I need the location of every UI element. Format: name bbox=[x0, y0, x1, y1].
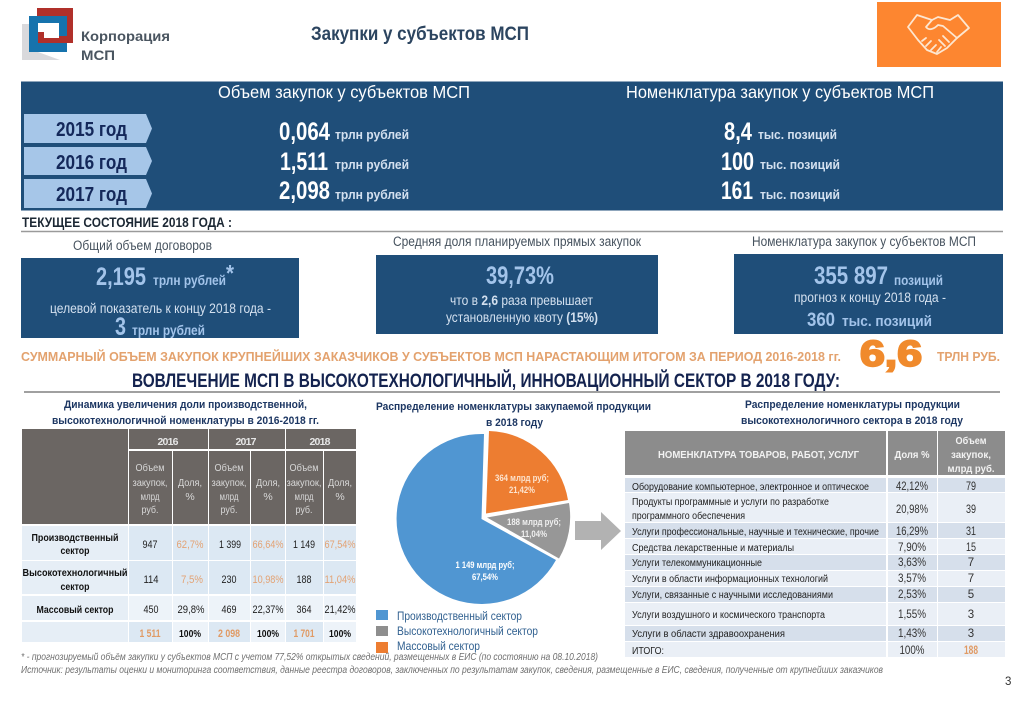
row: IT: 7 bbox=[968, 573, 974, 585]
row: software: программного обеспечения bbox=[632, 510, 745, 522]
row: IT: Услуги в области информационных технологий bbox=[632, 573, 828, 585]
callout: total volume 6,6 trillion bbox=[21, 333, 1000, 374]
panel: nomenclature 2018 bbox=[734, 234, 1003, 334]
row: software: 20,98% bbox=[896, 504, 928, 516]
row: computers and electronics: 79 bbox=[966, 481, 976, 493]
logo: Корпорация МСП bbox=[22, 8, 170, 63]
table header text: закупок, bbox=[132, 477, 168, 489]
row: totals: 2 098 bbox=[218, 628, 240, 640]
row: software bbox=[632, 496, 976, 522]
callout: total volume 6,6 trillion: 6,6 bbox=[860, 333, 922, 374]
panel: nomenclature 2018: Номенклатура закупок у субъектов МСП bbox=[752, 234, 976, 249]
title: Закупки у субъектов МСП bbox=[311, 24, 529, 45]
pie slice: high-tech sector: 11,04% bbox=[521, 529, 547, 539]
table header text: закупок, bbox=[212, 477, 246, 489]
panel: total contracts: 2,195 bbox=[96, 263, 146, 291]
row: totals: 1 511 bbox=[140, 628, 160, 640]
heading: procurement volume: Объем закупок у субъектов МСП bbox=[218, 82, 470, 102]
row: totals: 100% bbox=[179, 628, 202, 640]
nomenclature 2016: тыс. позиций bbox=[760, 157, 840, 172]
panel: nomenclature 2018: прогноз к концу 2018 года - bbox=[794, 290, 946, 305]
volume 2017: трлн рублей bbox=[335, 187, 409, 202]
row: air and space: 3 bbox=[968, 609, 974, 621]
row: healthcare bbox=[632, 628, 974, 640]
row: totals bbox=[140, 628, 352, 640]
nomenclature 2016: 100 bbox=[721, 148, 754, 176]
pie slice: mass sector: 364 млрд руб; bbox=[495, 473, 549, 483]
table title: Распределение номенклатуры продукции bbox=[745, 399, 960, 411]
row: mass sector: 450 bbox=[144, 604, 158, 616]
table header text: млрд bbox=[294, 491, 314, 503]
row: totals: 1 701 bbox=[294, 628, 314, 640]
row: research bbox=[632, 589, 974, 601]
row: high-tech sector bbox=[22, 568, 356, 593]
row: mass sector: 364 bbox=[296, 604, 312, 616]
volume 2016 bbox=[280, 148, 409, 176]
row: mass sector: 22,37% bbox=[252, 604, 284, 616]
footnote: Источник: результаты оценки и мониторинга соответствия, данные реестра договоров, заключенных по результатам закупок, сведения, размещенные в ЕИС, сведения, полученные от крупнейших заказчиков bbox=[21, 665, 883, 676]
table header bbox=[625, 431, 1005, 475]
row: mass sector bbox=[36, 604, 356, 616]
table header text: % bbox=[185, 491, 195, 503]
table header text bbox=[132, 436, 352, 516]
row: production sector: 1 149 bbox=[293, 539, 315, 551]
row: total bbox=[632, 645, 978, 657]
table header text: 2018 bbox=[310, 436, 331, 448]
table header: Доля % bbox=[894, 449, 930, 461]
legend bbox=[376, 609, 538, 653]
heading: current state 2018: ТЕКУЩЕЕ СОСТОЯНИЕ 2018 ГОДА : bbox=[22, 214, 232, 230]
row: research: Услуги, связанные с научными исследованиями bbox=[632, 590, 833, 601]
row: computers and electronics: Оборудование компьютерное, электронное и оптическое bbox=[632, 481, 869, 493]
pie title: в 2018 году bbox=[486, 417, 544, 429]
row: high-tech sector: 10,98% bbox=[252, 574, 284, 586]
panel: direct procurement share: 39,73% bbox=[486, 262, 554, 290]
panel: total contracts: 3 bbox=[115, 313, 126, 341]
nomenclature 2016 bbox=[721, 148, 840, 176]
pie slice: production sector: 67,54% bbox=[472, 572, 498, 582]
row: healthcare: 3 bbox=[968, 628, 974, 640]
row: software: Продукты программные и услуги по разработке bbox=[632, 496, 829, 508]
table header text: % bbox=[263, 491, 273, 503]
row: high-tech sector: 188 bbox=[296, 574, 312, 586]
panel: direct procurement share: установленную квоту (15%) bbox=[446, 310, 598, 325]
arrow label: 2015: 2015 год bbox=[56, 119, 127, 141]
page number: 3 bbox=[1005, 676, 1011, 688]
row: total: 188 bbox=[964, 645, 978, 657]
table header text: руб. bbox=[220, 504, 238, 516]
panel: nomenclature 2018: тыс. позиций bbox=[842, 313, 932, 330]
row: research: 5 bbox=[968, 589, 974, 601]
panel: high-tech nomenclature table bbox=[625, 399, 1005, 657]
row: production sector: 66,64% bbox=[252, 539, 284, 551]
logo: Корпорация МСП: МСП bbox=[81, 47, 115, 63]
footnote bbox=[21, 651, 883, 676]
table header text: Объем bbox=[290, 462, 318, 474]
pie slice: production sector bbox=[397, 434, 556, 604]
footnote: * - прогнозируемый объём закупки у субъектов МСП с учетом 77,52% открытых сведений, размещенных в ЕИС (по состоянию на 08.10.2018) bbox=[21, 651, 598, 663]
row: professional services: Услуги профессиональные, научные и технические, прочие bbox=[632, 526, 879, 538]
row: production sector: 67,54% bbox=[324, 539, 356, 551]
row: computers and electronics: 42,12% bbox=[896, 481, 928, 493]
row: medicines: Средства лекарственные и материалы bbox=[632, 543, 794, 554]
panel: total contracts: Общий объем договоров bbox=[73, 238, 212, 253]
pie title bbox=[376, 401, 651, 429]
panel: 2015-2017 indicators bbox=[21, 82, 1003, 210]
table header text: Объем bbox=[136, 462, 164, 474]
row: production sector bbox=[32, 533, 356, 557]
row: totals: 100% bbox=[257, 628, 280, 640]
pie slice: mass sector: 21,42% bbox=[509, 485, 535, 495]
table header text: 2017 bbox=[236, 436, 257, 448]
row: telecom bbox=[632, 557, 974, 569]
table body fills bbox=[22, 526, 356, 642]
row: high-tech sector: Высокотехнологичный bbox=[22, 568, 128, 579]
volume 2017: 2,098 bbox=[279, 177, 330, 205]
row: healthcare: 1,43% bbox=[898, 628, 926, 640]
arrow label: 2017 bbox=[24, 179, 152, 208]
table header text: руб. bbox=[142, 504, 158, 516]
row: total: ИТОГО: bbox=[632, 646, 664, 657]
arrow label: 2016: 2016 год bbox=[56, 152, 127, 174]
legend: Высокотехнологичный сектор bbox=[397, 624, 538, 638]
table header text: закупок, bbox=[286, 477, 322, 489]
row: total: 100% bbox=[900, 645, 924, 657]
row: production sector: 947 bbox=[142, 539, 158, 551]
panel: pie chart bbox=[376, 401, 651, 653]
panel: nomenclature 2018: 355 897 bbox=[814, 262, 888, 290]
panel: dynamics table bbox=[22, 399, 356, 642]
row: high-tech sector: 7,5% bbox=[181, 574, 203, 586]
panel: total contracts: * bbox=[226, 260, 234, 286]
pie slice: high-tech sector bbox=[487, 503, 570, 558]
pie slice: high-tech sector: 188 млрд руб; bbox=[507, 517, 561, 527]
pie slice: mass sector bbox=[486, 431, 568, 514]
panel: total contracts: трлн рублей bbox=[153, 273, 226, 288]
volume 2015 bbox=[279, 118, 409, 146]
table header text: млрд bbox=[220, 491, 238, 503]
table header: Объем bbox=[956, 435, 987, 447]
row: high-tech sector: 11,04% bbox=[324, 574, 356, 586]
table header text: Доля, bbox=[178, 477, 202, 489]
panel: total contracts: трлн рублей bbox=[132, 323, 205, 338]
panel: direct procurement share: что в 2,6 раза превышает bbox=[450, 293, 593, 308]
volume 2015: 0,064 bbox=[279, 118, 330, 146]
arrow label: 2017: 2017 год bbox=[56, 184, 127, 206]
row: IT bbox=[632, 573, 974, 585]
nomenclature 2017 bbox=[721, 177, 840, 205]
panel: direct procurement share: Средняя доля планируемых прямых закупок bbox=[393, 234, 641, 249]
row: production sector: 1 399 bbox=[219, 539, 241, 551]
table header text: Доля, bbox=[256, 477, 280, 489]
table row stripes bbox=[625, 478, 1005, 657]
row: air and space bbox=[632, 609, 974, 621]
row: medicines: 7,90% bbox=[898, 542, 926, 554]
table header text: % bbox=[335, 491, 345, 503]
legend: Производственный сектор bbox=[397, 609, 522, 623]
panel: nomenclature 2018: 360 bbox=[807, 310, 835, 331]
table header: НОМЕНКЛАТУРА ТОВАРОВ, РАБОТ, УСЛУГ bbox=[658, 449, 859, 461]
heading: procurement nomenclature: Номенклатура закупок у субъектов МСП bbox=[626, 82, 934, 102]
table header: млрд руб. bbox=[948, 463, 995, 475]
panel: direct procurement share bbox=[376, 234, 658, 334]
panel: total contracts bbox=[21, 238, 299, 341]
row: air and space: 1,55% bbox=[898, 609, 926, 621]
pie title: Распределение номенклатуры закупаемой продукции bbox=[376, 401, 651, 413]
callout: total volume 6,6 trillion: ТРЛН РУБ. bbox=[937, 350, 1000, 364]
panel: total contracts: целевой показатель к концу 2018 года - bbox=[50, 300, 271, 316]
row: IT: 3,57% bbox=[898, 573, 926, 585]
row: high-tech sector: 230 bbox=[222, 574, 236, 586]
pie slice: production sector: 1 149 млрд руб; bbox=[456, 560, 514, 570]
row: mass sector: Массовый сектор bbox=[36, 605, 114, 616]
table header text: руб. bbox=[296, 504, 312, 516]
row: professional services: 16,29% bbox=[896, 526, 928, 538]
arrow bbox=[575, 512, 621, 550]
table title: Динамика увеличения доли производственной, bbox=[64, 399, 307, 411]
table title: высокотехнологичного сектора в 2018 году bbox=[741, 415, 964, 427]
volume 2017 bbox=[279, 177, 409, 205]
section heading: high-tech involvement: ВОВЛЕЧЕНИЕ МСП В ВЫСОКОТЕХНОЛОГИЧНЫЙ, ИННОВАЦИОННЫЙ СЕКТОР В 2018 ГОДУ: bbox=[132, 370, 840, 392]
table title bbox=[741, 399, 964, 427]
callout: total volume 6,6 trillion: СУММАРНЫЙ ОБЪЕМ ЗАКУПОК КРУПНЕЙШИХ ЗАКАЗЧИКОВ У СУБЪЕКТОВ МСП НАРАСТАЮЩИМ ИТОГОМ ЗА ПЕРИОД 2016-2018 гг. bbox=[21, 349, 841, 364]
arrow label: 2015 bbox=[24, 114, 152, 143]
panel: nomenclature 2018: позиций bbox=[894, 273, 943, 288]
nomenclature 2017: тыс. позиций bbox=[760, 187, 840, 202]
nomenclature 2017: 161 bbox=[721, 177, 753, 205]
row: totals: 100% bbox=[329, 628, 352, 640]
volume 2015: трлн рублей bbox=[335, 127, 409, 142]
arrow label: 2016 bbox=[24, 147, 152, 175]
table title bbox=[52, 399, 319, 427]
volume 2016: трлн рублей bbox=[335, 157, 409, 172]
logo: Корпорация МСП: Корпорация bbox=[81, 28, 170, 44]
row: research: 2,53% bbox=[898, 589, 926, 601]
row: telecom: Услуги телекоммуникационные bbox=[632, 558, 762, 569]
row: mass sector: 29,8% bbox=[178, 604, 205, 616]
table header cells bbox=[22, 429, 356, 524]
row: medicines: 15 bbox=[966, 542, 976, 554]
legend: Массовый сектор bbox=[397, 639, 480, 653]
row: production sector: 62,7% bbox=[176, 539, 204, 551]
row: telecom: 3,63% bbox=[898, 557, 926, 569]
row: software: 39 bbox=[966, 504, 976, 516]
table header: закупок, bbox=[951, 449, 991, 461]
nomenclature 2015: 8,4 bbox=[724, 118, 752, 146]
row: production sector: Производственный bbox=[32, 533, 118, 544]
row: mass sector: 21,42% bbox=[324, 604, 356, 616]
volume 2016: 1,511 bbox=[280, 148, 328, 176]
icon: handshake on orange box bbox=[877, 2, 1001, 67]
table header text: 2016 bbox=[158, 436, 179, 448]
row: telecom: 7 bbox=[968, 557, 974, 569]
nomenclature 2015: тыс. позиций bbox=[758, 127, 837, 142]
row: production sector: сектор bbox=[60, 546, 90, 557]
nomenclature 2015 bbox=[724, 118, 837, 146]
table title: высокотехнологичной номенклатуры в 2016-2018 гг. bbox=[52, 415, 319, 427]
row: medicines bbox=[632, 542, 976, 554]
row: mass sector: 469 bbox=[222, 604, 236, 616]
row: professional services: 31 bbox=[966, 526, 976, 538]
table header text: млрд bbox=[140, 491, 160, 503]
table header text: Объем bbox=[214, 462, 244, 474]
row: high-tech sector: сектор bbox=[60, 582, 90, 593]
table header text: Доля, bbox=[328, 477, 352, 489]
row: high-tech sector: 114 bbox=[144, 574, 158, 586]
row: air and space: Услуги воздушного и космического транспорта bbox=[632, 610, 825, 621]
row: healthcare: Услуги в области здравоохранения bbox=[632, 628, 785, 640]
